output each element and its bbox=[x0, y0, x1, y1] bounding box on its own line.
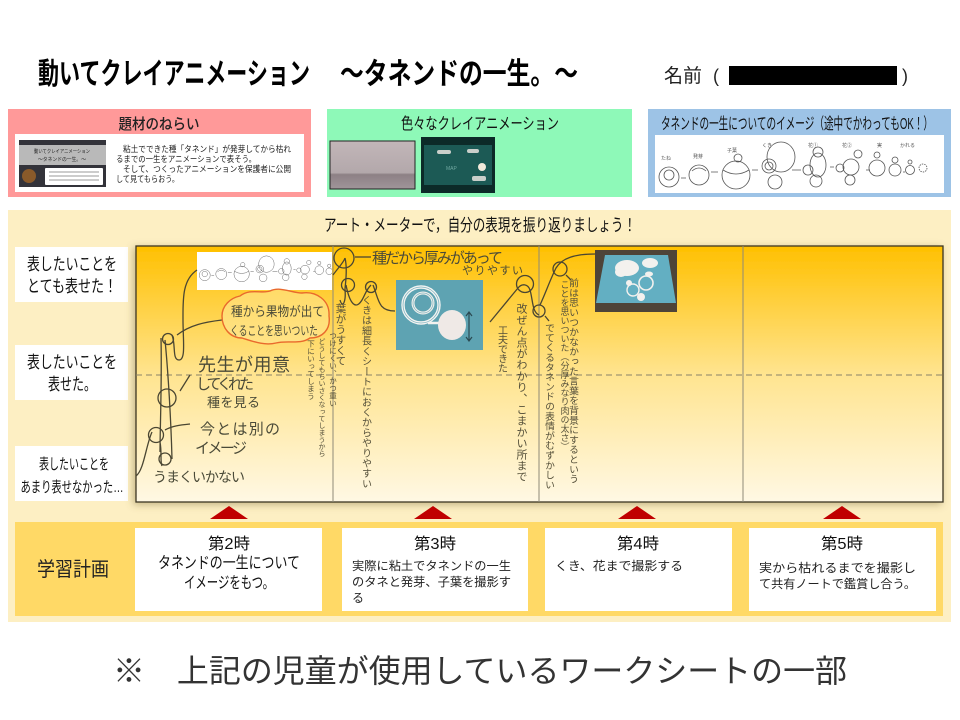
name field: ( bbox=[713, 66, 719, 86]
handwritten notes: lesson 3: 改ぜん点がわかり、こまかい所まで bbox=[514, 303, 530, 482]
level label: middle: 表したいことを bbox=[27, 353, 117, 372]
title: 動いてクレイアニメーション bbox=[38, 58, 310, 91]
sketch image in chart bbox=[197, 252, 347, 290]
aim text bbox=[116, 144, 292, 184]
handwritten notes: lesson 2: 種を見る bbox=[207, 392, 260, 411]
lesson card 5: 実から枯れるまでを撮影し bbox=[759, 560, 916, 575]
comment bubble: 種から果物が出て bbox=[231, 301, 324, 320]
lesson card 3: 第3時 bbox=[414, 535, 456, 553]
level label: low bbox=[15, 446, 128, 501]
panel: タネンドの一生についてのイメージ bbox=[648, 109, 951, 197]
handwritten notes: lesson 3: 葉がうすくて bbox=[334, 302, 348, 366]
name field: 名前 bbox=[664, 65, 702, 87]
handwritten notes: lesson 4: でてくるタネンドの表情がむずかしい bbox=[543, 323, 557, 490]
handwritten notes: lesson 3: 種だから厚みがあって bbox=[372, 247, 503, 268]
lesson card 2: 第2時 bbox=[208, 535, 250, 553]
arrows: lesson markers bbox=[210, 506, 861, 519]
chart: art meter record bbox=[136, 246, 943, 502]
photo: clay seed and stem bbox=[396, 280, 483, 350]
handwritten notes: lesson 2: うまくいかない bbox=[153, 467, 245, 487]
handwritten notes: lesson 4 bbox=[543, 277, 581, 490]
level label: middle bbox=[15, 345, 128, 400]
comment bubble: くることを思いついた bbox=[230, 320, 318, 339]
lesson card 4: くき、花まで撮影する bbox=[555, 558, 683, 573]
name field bbox=[664, 65, 908, 87]
lesson card 4 bbox=[545, 528, 732, 611]
handwritten notes: lesson 3: くきは細長くシートにおくからやりやすい bbox=[360, 295, 374, 489]
lesson card 2 bbox=[135, 528, 322, 611]
panel: 題材のねらい bbox=[8, 109, 311, 197]
photo: clay animation still 2 bbox=[421, 137, 495, 193]
footnote: ※ 上記の児童が使用しているワークシートの一部 bbox=[113, 653, 847, 689]
handwritten notes: lesson 2: 今とは別の bbox=[200, 418, 280, 439]
level label: middle: 表せた。 bbox=[48, 375, 96, 394]
handwritten notes: lesson 3: 工夫できた bbox=[496, 325, 510, 373]
handwritten notes: lesson 3: やりやすい bbox=[462, 262, 523, 278]
level label: high bbox=[15, 247, 128, 302]
lesson card 3: 実際に粘土でタネンドの一生 bbox=[352, 558, 511, 573]
level label: high: 表したいことを bbox=[27, 255, 117, 274]
panel heading: 色々なクレイアニメーション: 色々なクレイアニメーション bbox=[401, 115, 559, 133]
learner trace line bbox=[136, 248, 595, 476]
handwritten notes: lesson 4: 前は思いつかなかった言葉を背景にするという bbox=[567, 277, 581, 484]
panel: 色々なクレイアニメーション bbox=[327, 109, 632, 197]
photo: clay animation still 1 bbox=[330, 141, 415, 189]
thumbnail: worksheet cover: 動いてクレイアニメーション bbox=[34, 148, 90, 155]
art meter heading: アート・メーターで，自分の表現を振り返りましょう！ bbox=[324, 216, 636, 235]
handwritten notes: lesson 2: どうしてもちいさくなってしまうから bbox=[317, 338, 327, 457]
handwritten notes: lesson 3 bbox=[334, 247, 530, 489]
lesson card 3: る bbox=[352, 591, 364, 605]
comment bubble bbox=[222, 289, 329, 344]
drawing: life stages of the seed: 実 bbox=[877, 142, 882, 149]
level label: low: 表したいことを bbox=[39, 456, 109, 473]
handwritten notes: lesson 2 bbox=[153, 332, 338, 487]
aim text: そして、つくったアニメーションを保護者に公開 bbox=[123, 164, 291, 174]
handwritten notes: lesson 2: 先生が用意 bbox=[198, 351, 290, 377]
drawing: life stages of the seed bbox=[659, 142, 927, 189]
lesson card 4: 第4時 bbox=[617, 535, 659, 553]
lesson card 5 bbox=[749, 528, 936, 611]
aim text: るまでの一生をアニメーションで表そう。 bbox=[116, 154, 256, 164]
photo: clay animation still 2: MAP bbox=[446, 166, 458, 172]
handwritten notes: lesson 2: つけにくい、かつ重い bbox=[328, 332, 338, 407]
lesson card 3: のタネと発芽、子葉を撮影す bbox=[352, 574, 511, 589]
level label: high: とても表せた！ bbox=[27, 277, 117, 296]
handwritten notes: lesson 2: してくれた bbox=[196, 373, 254, 394]
handwritten notes: lesson 2: 下にいってしまう bbox=[306, 340, 316, 400]
level label: low: あまり表せなかった… bbox=[20, 479, 124, 496]
aim text: して見てもらおう。 bbox=[116, 174, 179, 184]
panel: art meter bbox=[8, 210, 951, 689]
lesson card 2: タネンドの一生について bbox=[158, 554, 300, 572]
handwritten notes: lesson 4: ことを思いついた（分厚みなり肉の太さ） bbox=[558, 280, 572, 451]
lesson card 3 bbox=[342, 528, 528, 611]
lesson card 5: 第5時 bbox=[821, 535, 863, 553]
drawing: life stages of the seed: くき bbox=[762, 142, 772, 149]
panel heading: 題材のねらい: 題材のねらい bbox=[118, 116, 200, 133]
handwritten notes: lesson 2: イメージ bbox=[195, 437, 247, 458]
drawing: life stages of the seed: 花② bbox=[842, 142, 852, 149]
lesson card 2: イメージをもつ。 bbox=[184, 574, 274, 592]
photo: clay flowers on board bbox=[595, 250, 677, 312]
title: ～タネンドの一生。～ bbox=[340, 58, 578, 91]
drawing: life stages of the seed: 花① bbox=[808, 142, 818, 149]
name field: ) bbox=[902, 66, 908, 86]
drawing: life stages of the seed: 発芽 bbox=[693, 153, 703, 160]
lesson card 5: て共有ノートで鑑賞し合う。 bbox=[759, 576, 916, 591]
learning plan band bbox=[15, 522, 943, 616]
drawing: life stages of the seed: 子葉 bbox=[727, 147, 737, 154]
drawing: life stages of the seed: かれる bbox=[900, 142, 915, 149]
thumbnail: worksheet cover bbox=[19, 140, 106, 187]
aim text: 粘土でできた種「タネンド」が発芽してから枯れ bbox=[123, 144, 292, 154]
drawing: life stages of the seed: たね bbox=[661, 156, 671, 162]
learning plan heading: 学習計画 bbox=[37, 558, 109, 581]
thumbnail: worksheet cover: ～タネンドの一生。～ bbox=[38, 156, 86, 163]
